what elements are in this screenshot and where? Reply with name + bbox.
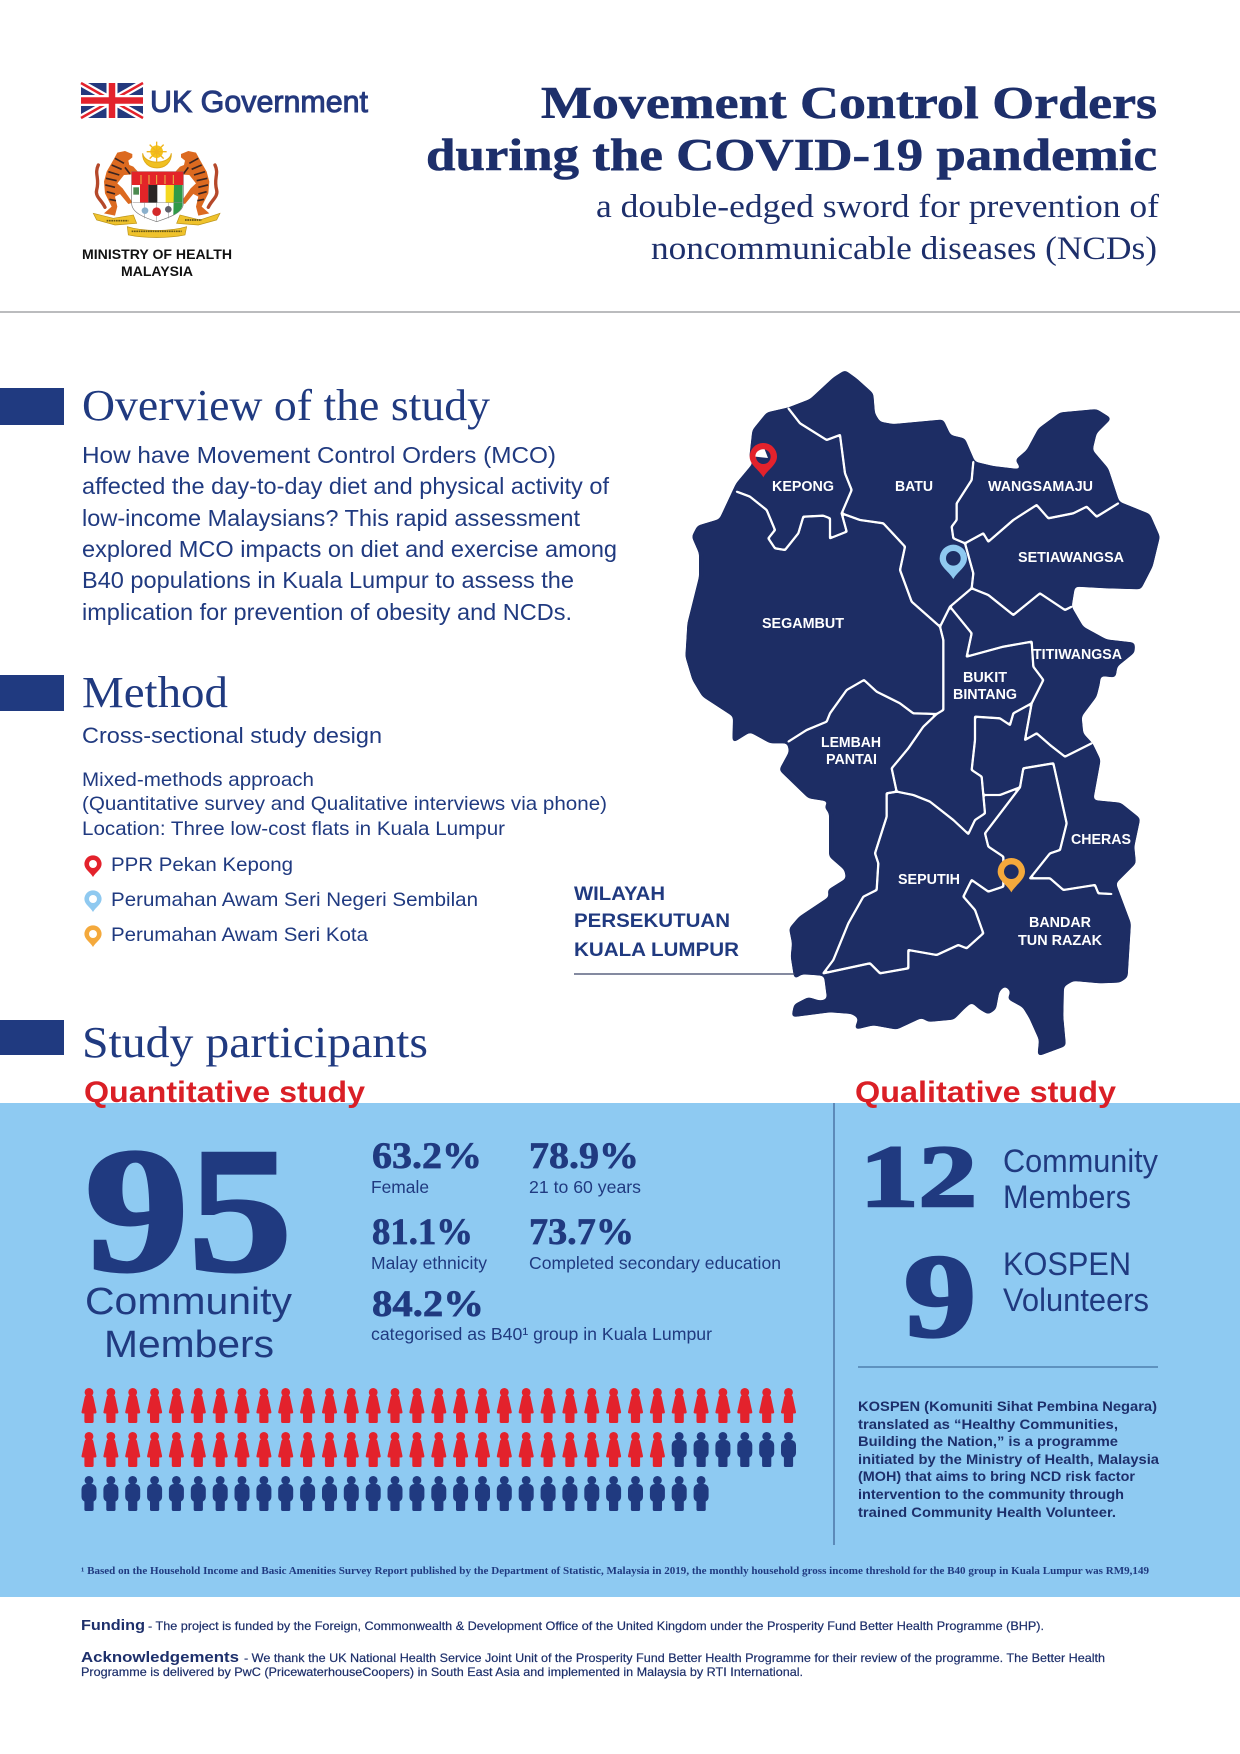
icon: red map pin xyxy=(750,443,777,477)
stat: ethnicity xyxy=(371,1212,487,1273)
KOSPEN description: trained Community Health Volunteer. xyxy=(858,1505,1116,1520)
acknowledgements xyxy=(81,1649,1105,1679)
stat: female: Female xyxy=(371,1177,429,1197)
subtitle: a double-edged sword for prevention of xyxy=(596,189,1159,225)
KOSPEN description: (MOH) that aims to bring NCD risk factor xyxy=(858,1469,1136,1484)
Ministry of Health label: MALAYSIA xyxy=(121,263,193,279)
district labels: CHERAS xyxy=(1071,832,1131,848)
district labels: BINTANG xyxy=(953,687,1017,703)
approach text xyxy=(82,769,607,840)
panel: method xyxy=(0,668,607,947)
district labels: BATU xyxy=(895,479,933,495)
stat: education: 73.7% xyxy=(529,1212,634,1253)
map label: Wilayah Persekutuan Kuala Lumpur: WILAYAH xyxy=(574,883,665,905)
section marker xyxy=(0,1020,64,1055)
approach text: Location: Three low-cost flats in Kuala Lumpur xyxy=(82,818,506,840)
panel: blue study participants background xyxy=(0,1103,1240,1597)
stat: 95 community members: 95 xyxy=(85,1111,292,1309)
stat: 12 community members: Community xyxy=(1003,1143,1158,1179)
acknowledgements: Programme is delivered by PwC (PricewaterhouseCoopers) in South East Asia and implemented in Malaysia by RTI International. xyxy=(81,1665,803,1679)
icon: red pin xyxy=(84,855,102,877)
district labels: BUKIT xyxy=(963,670,1007,686)
icon: orange pin xyxy=(84,925,102,947)
stat: 12 community members: Members xyxy=(1003,1179,1131,1215)
title: during the COVID-19 pandemic xyxy=(426,130,1157,180)
stat: 95 community members xyxy=(85,1111,292,1366)
heading: qualitative study: Qualitative study xyxy=(855,1076,1116,1109)
map: Kuala Lumpur districts xyxy=(685,370,1160,1057)
map label: Wilayah Persekutuan Kuala Lumpur: PERSEKUTUAN xyxy=(574,910,730,932)
overview paragraph: affected the day-to-day diet and physical activity of xyxy=(82,473,610,499)
stat: 9 KOSPEN volunteers: KOSPEN xyxy=(1003,1246,1131,1282)
map label: Wilayah Persekutuan Kuala Lumpur xyxy=(574,883,795,974)
heading: method: Method xyxy=(82,668,228,717)
stat: 95 community members: Community xyxy=(85,1281,292,1323)
Ministry of Health label xyxy=(82,246,232,279)
overview paragraph: How have Movement Control Orders (MCO) xyxy=(82,442,556,468)
district labels: PANTAI xyxy=(826,752,877,768)
heading: overview: Overview of the study xyxy=(82,381,490,430)
stat: education xyxy=(529,1212,781,1273)
stat: age: 21 to 60 years xyxy=(529,1177,641,1197)
funding statement: Funding xyxy=(81,1617,145,1634)
stat: age xyxy=(529,1136,641,1197)
Ministry of Health label: MINISTRY OF HEALTH xyxy=(82,246,232,262)
district labels xyxy=(762,479,1131,949)
legend: flat locations: Perumahan Awam Seri Negeri Sembilan xyxy=(111,889,478,911)
KOSPEN description: KOSPEN (Komuniti Sihat Pembina Negara) xyxy=(858,1399,1157,1414)
district labels: TITIWANGSA xyxy=(1033,647,1123,663)
district labels: SEGAMBUT xyxy=(762,616,844,632)
section marker xyxy=(0,675,64,711)
stat: B40 xyxy=(371,1284,712,1344)
district labels: WANGSAMAJU xyxy=(988,479,1093,495)
district labels: TUN RAZAK xyxy=(1018,933,1103,949)
stat: 9 KOSPEN volunteers xyxy=(904,1230,1149,1362)
district labels: BANDAR xyxy=(1029,915,1092,931)
stat: B40: 84.2% xyxy=(372,1284,484,1325)
study design: Cross-sectional study design xyxy=(82,723,382,748)
legend: flat locations xyxy=(84,854,478,947)
overview paragraph: explored MCO impacts on diet and exercise among xyxy=(82,536,617,562)
pictogram: 60 female and 35 male participants xyxy=(81,1388,796,1511)
section marker xyxy=(0,388,64,425)
stat: 12 community members xyxy=(860,1129,1158,1226)
KOSPEN description xyxy=(858,1399,1160,1520)
KOSPEN description: initiated by the Ministry of Health, Malaysia xyxy=(858,1452,1160,1467)
icon: blue pin xyxy=(84,890,102,912)
header: logos xyxy=(81,83,368,279)
stat: age: 78.9% xyxy=(529,1136,639,1177)
footnote: ¹ Based on the Household Income and Basic Amenities Survey Report published by the Department of Statistic, Malaysia in 2019, the monthly household gross income threshold for the B40 group in Kuala Lumpur was RM9,149 xyxy=(81,1566,1149,1577)
title: Movement Control Orders xyxy=(541,78,1157,128)
icon: Malaysia coat of arms xyxy=(93,142,220,237)
map label: Wilayah Persekutuan Kuala Lumpur: KUALA LUMPUR xyxy=(574,939,739,961)
overview paragraph xyxy=(82,442,617,625)
acknowledgements: Acknowledgements xyxy=(81,1649,239,1666)
stat: ethnicity: Malay ethnicity xyxy=(371,1253,487,1273)
icon: orange map pin xyxy=(998,858,1025,892)
heading: study participants: Study participants xyxy=(82,1018,428,1067)
approach text: (Quantitative survey and Qualitative interviews via phone) xyxy=(82,793,607,815)
acknowledgements: - We thank the UK National Health Service Joint Unit of the Prosperity Fund Better Health Programme for their review of the programme. The Better Health xyxy=(244,1651,1105,1665)
stat: 9 KOSPEN volunteers: Volunteers xyxy=(1003,1282,1149,1318)
demographic statistics xyxy=(371,1136,781,1344)
title xyxy=(426,78,1157,180)
subtitle xyxy=(596,189,1159,267)
overview paragraph: low-income Malaysians? This rapid assessment xyxy=(82,505,581,531)
heading: quantitative study: Quantitative study xyxy=(84,1076,365,1109)
district labels: SETIAWANGSA xyxy=(1018,550,1125,566)
UK Government wordmark: UK Government xyxy=(150,84,368,119)
KOSPEN description: Building the Nation,” is a programme xyxy=(858,1434,1119,1449)
KOSPEN description: intervention to the community through xyxy=(858,1487,1124,1502)
subtitle: noncommunicable diseases (NCDs) xyxy=(651,231,1157,267)
stat: education: Completed secondary education xyxy=(529,1253,781,1273)
stat: female: 63.2% xyxy=(372,1136,482,1177)
stat: 9 KOSPEN volunteers: 9 xyxy=(904,1230,976,1362)
overview paragraph: B40 populations in Kuala Lumpur to assess the xyxy=(82,567,574,593)
district labels: SEPUTIH xyxy=(898,872,960,888)
icon: blue map pin xyxy=(940,545,967,579)
KOSPEN description: translated as “Healthy Communities, xyxy=(858,1417,1118,1432)
approach text: Mixed-methods approach xyxy=(82,769,314,791)
stat: 95 community members: Members xyxy=(104,1324,274,1366)
stat: B40: categorised as B40¹ group in Kuala Lumpur xyxy=(371,1324,712,1344)
stat: ethnicity: 81.1% xyxy=(372,1212,473,1253)
panel: study participants heading xyxy=(0,1018,428,1067)
legend: flat locations: PPR Pekan Kepong xyxy=(111,854,293,876)
district labels: LEMBAH xyxy=(821,735,881,751)
map outline and district borders xyxy=(685,370,1160,1057)
panel: overview of the study xyxy=(0,381,617,625)
stat: female xyxy=(371,1136,482,1197)
funding statement: - The project is funded by the Foreign, Commonwealth & Development Office of the United Kingdom under the Prosperity Fund Better Health Programme (BHP). xyxy=(148,1619,1044,1633)
icon: UK flag xyxy=(81,83,143,118)
stat: 12 community members: 12 xyxy=(860,1129,977,1226)
overview paragraph: implication for prevention of obesity and NCDs. xyxy=(82,599,572,625)
district labels: KEPONG xyxy=(772,479,834,495)
legend: flat locations: Perumahan Awam Seri Kota xyxy=(111,924,368,946)
